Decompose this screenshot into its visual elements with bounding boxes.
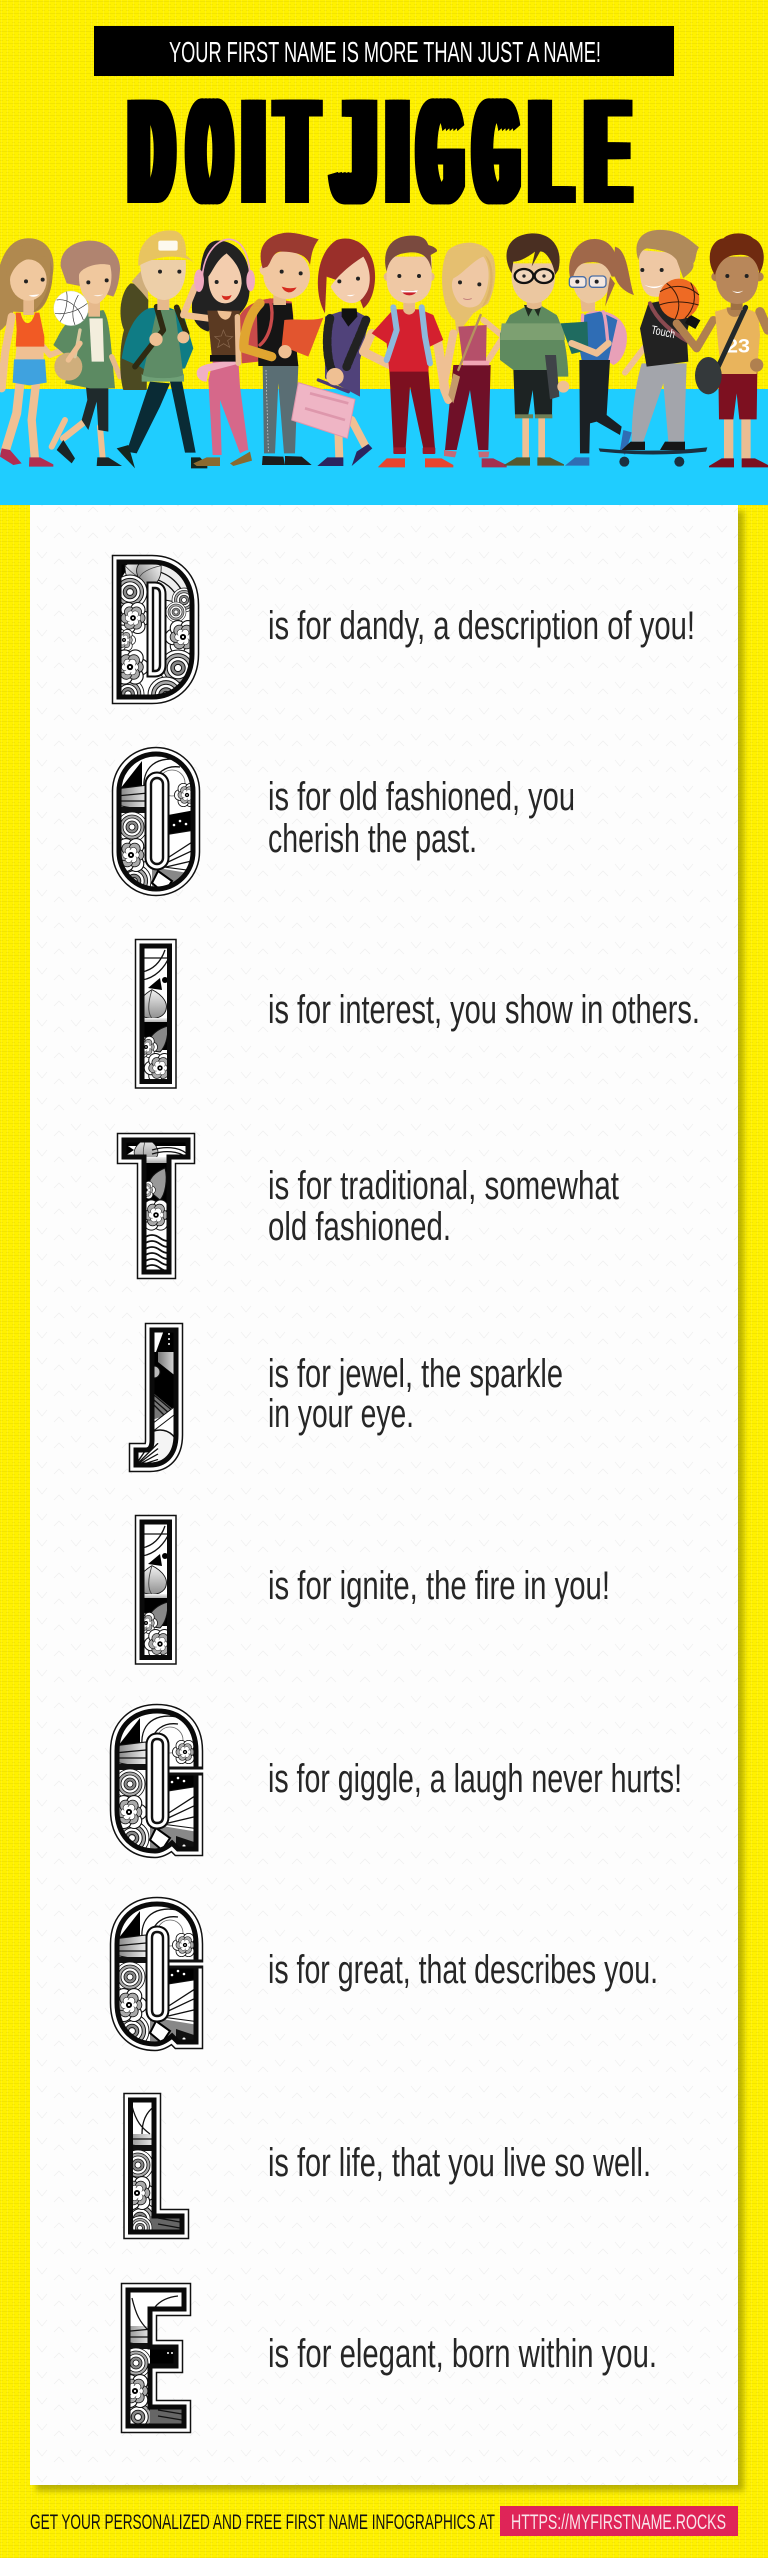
text O: is for old fashioned, you: [268, 775, 575, 819]
ornamental letter I: [134, 944, 176, 1084]
students 9 to 13: [500, 230, 768, 467]
footer: [30, 2506, 738, 2536]
ornamental letter O: [112, 747, 204, 898]
student 5: boy reading orange book: [240, 233, 323, 465]
title: DOIT JIGGLE: J: [334, 67, 375, 235]
text O: [268, 775, 575, 861]
row I: ornamental letter and text: [134, 944, 700, 1084]
student 10: girl with ponytail and tablet: [561, 239, 634, 466]
row G (second): ornamental letter and text: [110, 1897, 658, 2048]
text T: is for traditional, somewhat: [268, 1164, 619, 1208]
row T: ornamental letter and text: [120, 1136, 619, 1278]
row O: ornamental letter and text: [112, 747, 575, 898]
ornamental letter D: [112, 554, 201, 713]
text J: is for jewel, the sparkle: [268, 1352, 563, 1396]
ornamental letter L: [123, 2092, 190, 2240]
title: DOIT JIGGLE: [127, 67, 634, 235]
blue floor band: [0, 389, 768, 505]
title: DOIT JIGGLE: E: [587, 67, 629, 235]
student 12: boy in number 23 tank top: [695, 233, 768, 467]
title: DOIT JIGGLE: O: [190, 67, 229, 235]
row D: ornamental letter and text: [112, 554, 695, 713]
text T: [268, 1164, 619, 1249]
title: DOIT JIGGLE: D: [131, 67, 171, 235]
ornamental letter J: [130, 1326, 180, 1470]
ornamental letter E: [120, 2282, 192, 2434]
row L: ornamental letter and text: [118, 2085, 651, 2240]
text J: [268, 1352, 563, 1436]
student 8: blonde girl with shoulder bag: [442, 243, 507, 467]
ornamental letter T: [120, 1136, 192, 1278]
text T: old fashioned.: [268, 1205, 451, 1249]
row J: ornamental letter and text: [130, 1326, 563, 1470]
text I second: is for ignite, the fire in you!: [268, 1564, 610, 1608]
student 11: skateboarder with basketball: [599, 230, 713, 467]
text O: cherish the past.: [268, 817, 477, 861]
student 6: girl with pink bag: [292, 239, 375, 466]
student 4: girl with pink headphones: [183, 239, 255, 466]
student 9: boy with glasses and laptop: [500, 233, 569, 466]
title: DOIT JIGGLE: T: [278, 67, 316, 235]
shirt lettering: Touch: [650, 323, 676, 341]
ornamental letter G: [110, 1897, 204, 2048]
student 2: girl with volleyball: [52, 241, 122, 466]
row E: ornamental letter and text: [116, 2283, 657, 2434]
footer url badge: [500, 2506, 738, 2536]
title: DOIT JIGGLE: I: [244, 67, 263, 235]
row I (second): ornamental letter and text: [134, 1520, 610, 1660]
title: DOIT JIGGLE: G: [476, 67, 516, 235]
title: DOIT JIGGLE: I: [388, 67, 407, 235]
students 5 to 8: [240, 233, 507, 467]
student 12: boy in number 23 tank top: 23: [726, 337, 750, 358]
students 1 to 4: [0, 230, 255, 468]
ornamental letter G: [110, 1704, 204, 1855]
student 1: girl in orange top: [0, 238, 78, 467]
title: DOIT JIGGLE: L: [531, 67, 570, 235]
student 7: boy in red t-shirt: [363, 236, 453, 467]
text J: in your eye.: [268, 1392, 414, 1436]
top banner: [94, 26, 674, 76]
title: DOIT JIGGLE: G: [420, 67, 461, 235]
row G: ornamental letter and text: [110, 1704, 682, 1855]
ornamental letter I: [134, 1520, 176, 1660]
illustration: group of thirteen students: [0, 230, 768, 468]
white content panel with shadow: [30, 505, 744, 2491]
student 3: hiker with yellow cap: [117, 230, 207, 468]
footer call to action: GET YOUR PERSONALIZED AND FREE FIRST NAME INFOGRAPHICS AT: [30, 2511, 495, 2534]
